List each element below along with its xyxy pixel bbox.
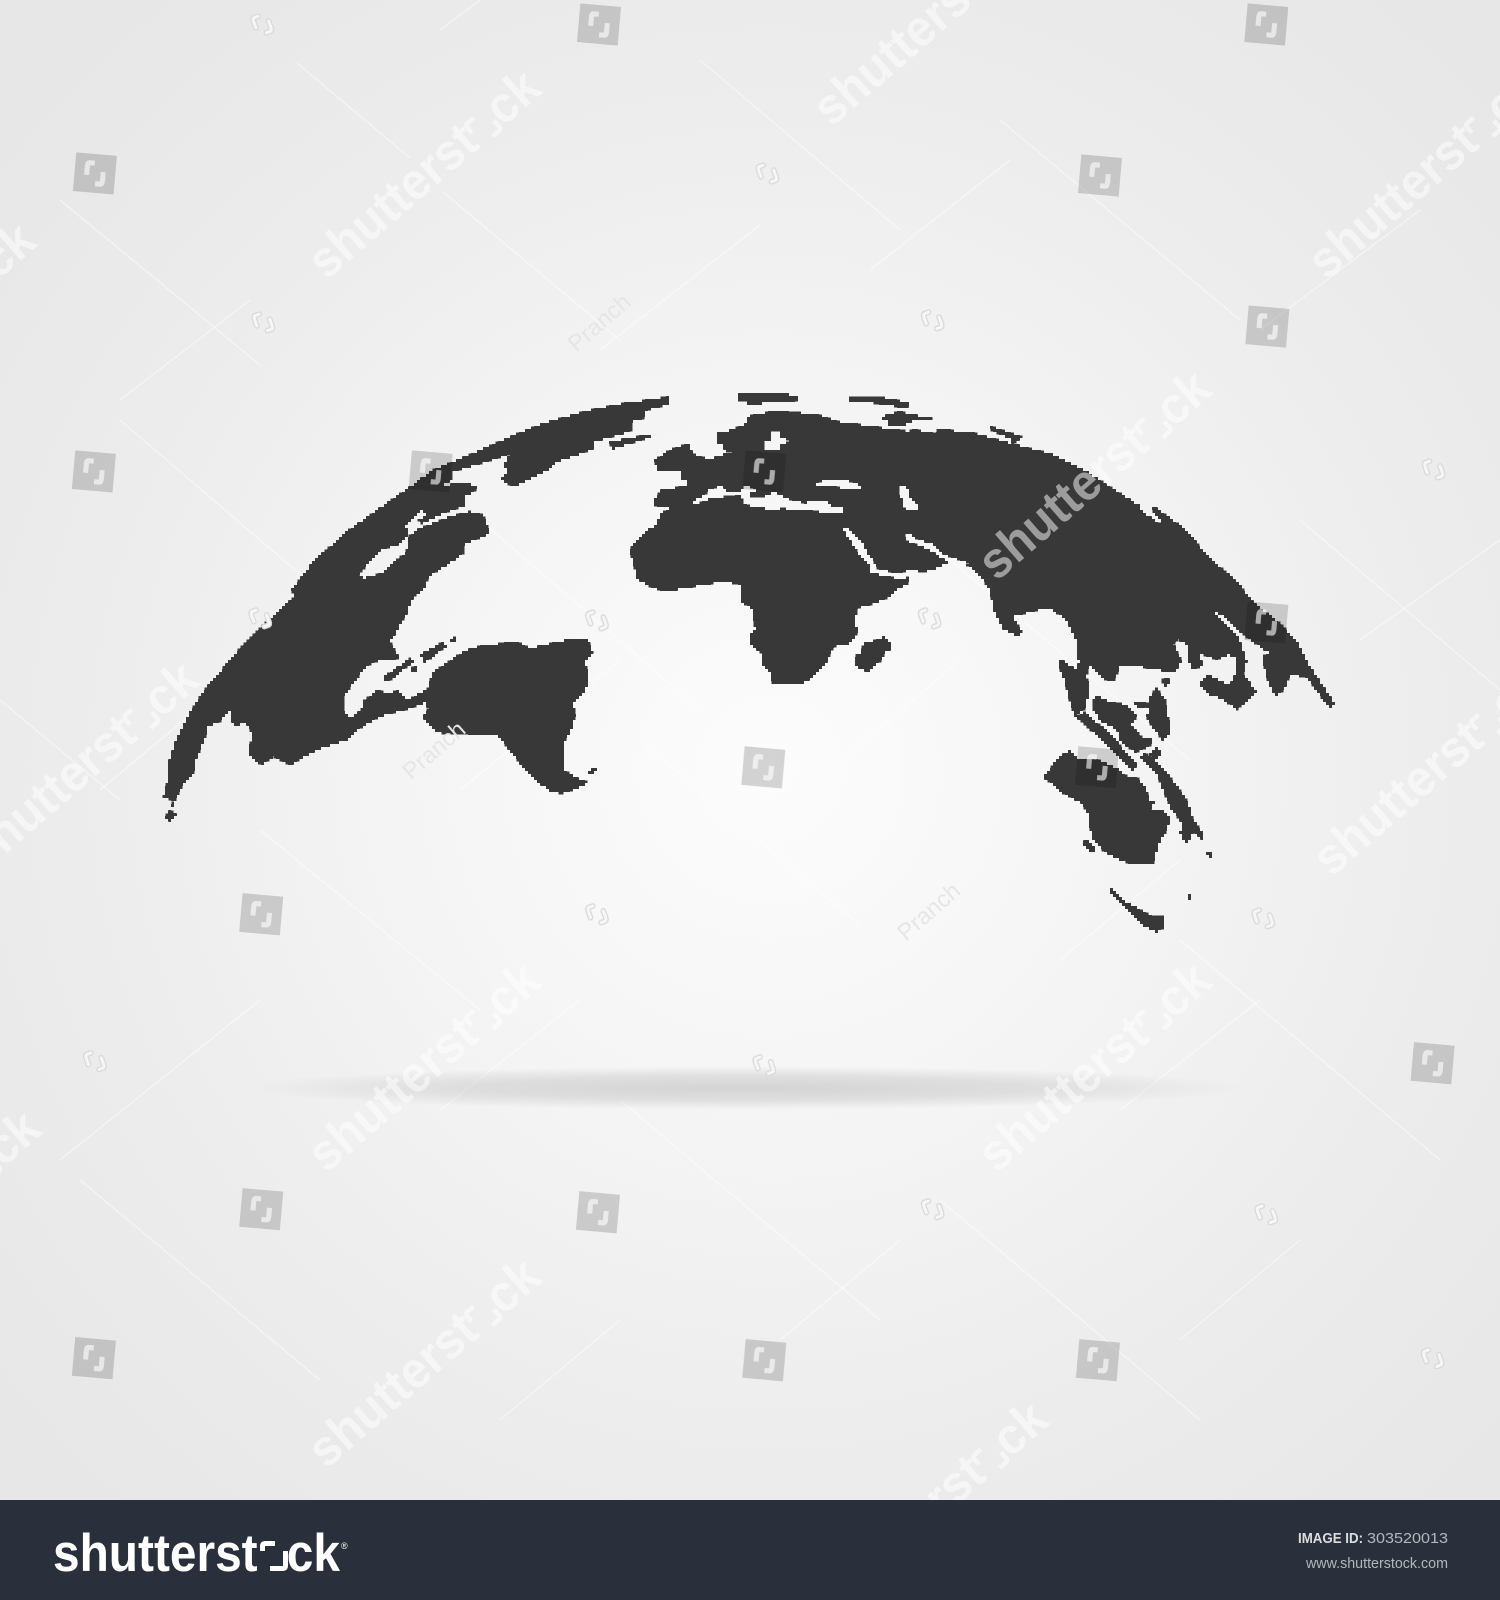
- website url: www.shutterstock.com: [1305, 1556, 1448, 1572]
- watermark wordmarks: shutterstock: [296, 57, 551, 289]
- watermark wordmarks: shutterstock: [966, 950, 1221, 1182]
- floor shadow under globe: [245, 1066, 1245, 1110]
- registered mark: ®: [341, 1541, 348, 1551]
- Europe and Africa: [629, 393, 973, 685]
- contributor watermarks: [397, 288, 965, 946]
- watermark square icons: [72, 3, 1455, 1381]
- watermark outline icons: [85, 13, 1444, 1369]
- contributor watermarks: Pranch: [397, 716, 470, 784]
- image id number: 303520013: [1367, 1531, 1448, 1547]
- watermark wordmarks: shutterstock: [296, 1246, 551, 1478]
- Americas: [163, 397, 670, 822]
- watermark wordmarks: shutterstock: [296, 950, 551, 1182]
- footer logo: shutterstock: [53, 1524, 340, 1583]
- Asia and Oceania: [943, 426, 1335, 932]
- world map globe: [163, 393, 1335, 932]
- image id: IMAGE ID:: [1298, 1531, 1363, 1547]
- contributor watermarks: Pranch: [563, 288, 636, 357]
- footer logo broken o mark: [262, 1544, 286, 1568]
- contributor watermarks: Pranch: [892, 877, 965, 946]
- footer bar: [0, 1500, 1500, 1600]
- watermark wordmarks: shutterstock: [966, 358, 1221, 590]
